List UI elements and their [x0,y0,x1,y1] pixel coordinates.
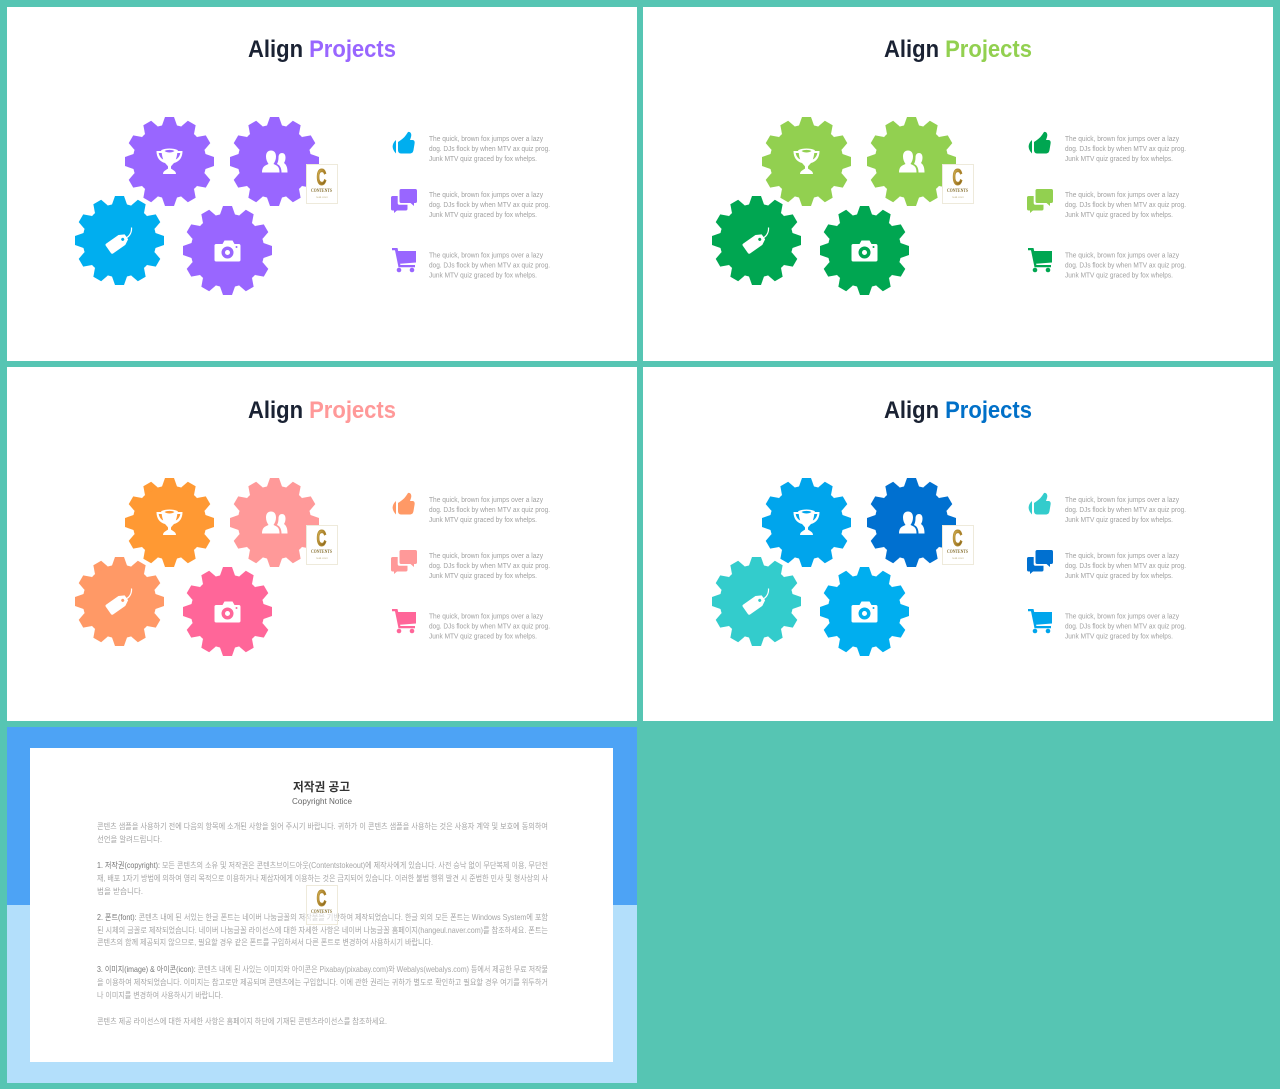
panel: green Align Projects [643,7,1273,361]
text: section 3 image and icon: 3. 이미지(image) & 아이콘(icon): 콘텐츠 내에 된 사있는 이미지와 아이콘은 Pixabay(pixabay.com)와 Webalys(webalys.com) 등에서 제공한 무료 저작물 [97,964,548,974]
watermark logo [942,164,974,204]
gear: price tag [75,557,164,646]
text: item 1: dog. DJs flock by when MTV ax quiz prog. [1065,507,1186,514]
text: item 3: dog. DJs flock by when MTV ax quiz prog. [1065,262,1186,270]
icon: thumbs up [1029,493,1051,514]
text: item 2: dog. DJs flock by when MTV ax quiz prog. [429,202,550,209]
text: item 3: The quick, brown fox jumps over a lazy [429,252,543,260]
gear: people [867,117,956,206]
text: item 2: Junk MTV quiz graced by fox whelps. [1065,573,1173,580]
title: Align Projects [884,36,1032,63]
watermark logo [306,164,338,204]
gear: trophy [762,478,851,567]
heading: copyright notice: 저작권 공고 [293,779,350,794]
watermark logo [306,885,338,924]
text: item 1: dog. DJs flock by when MTV ax quiz prog. [429,146,550,153]
gear: people [867,478,956,567]
gear: trophy [125,117,214,206]
text: item 2: The quick, brown fox jumps over a lazy [1065,553,1179,560]
icon: shopping cart [1028,248,1052,272]
text: section 2 font: 콘텐츠의 함께 제공되지 않으므로, 필요할 경우 같은 폰트를 구입하셔서 다른 폰트로 변경하여 사용하시기 바랍니다. [97,937,433,947]
text: intro: 콘텐츠 샘플을 사용하기 전에 다음의 항목에 소개된 사항을 읽어 주시기 바랍니다. 귀하가 이 콘텐츠 샘플을 사용하는 것은 사용자 계약 및 보호에 동의하여 [97,821,548,831]
text: item 2 [1065,192,1186,219]
watermark logo: C [952,164,962,190]
text: item 3: Junk MTV quiz graced by fox whelps. [1065,634,1173,640]
gear: camera [183,206,272,295]
text: item 2: dog. DJs flock by when MTV ax quiz prog. [429,563,550,570]
text: section 3 image and icon: 나 이미지를 변경하여 사용하시기 바랍니다. [97,990,223,1000]
watermark logo: real.com [316,195,329,199]
icon: thumbs up [393,132,415,154]
panel: purple Align Projects [7,7,637,361]
text: item 2 [429,553,550,580]
text: item 2: The quick, brown fox jumps over a lazy [429,192,543,199]
panel: copyright notice [7,727,637,1083]
text: item 2: Junk MTV quiz graced by fox whelps. [429,212,537,219]
gear: camera [820,206,909,295]
watermark logo: CONTENTS [311,910,332,915]
icon: speech bubbles [391,189,417,213]
text: intro [97,821,548,844]
text: item 3: Junk MTV quiz graced by fox whelps. [429,272,537,280]
text: item 2: The quick, brown fox jumps over a lazy [429,553,543,560]
text: item 1: Junk MTV quiz graced by fox whelps. [429,156,537,163]
watermark logo: real.com [316,556,329,560]
text: item 1: The quick, brown fox jumps over a lazy [1065,136,1179,143]
text: section 3 image and icon [97,964,548,1000]
icon: thumbs up [1029,132,1051,154]
watermark logo: C [316,525,326,551]
text: item 3 [1065,614,1186,640]
text: section 1 copyright: 1. 저작권(copyright): 모든 콘텐츠의 소유 및 저작권은 콘텐츠브이드아웃(Contentstokeout)에 제작사에게 있습니다. 사전 승낙 없이 무단복제 이용, 무단전 [97,860,548,870]
text: item 3: The quick, brown fox jumps over a lazy [1065,252,1179,260]
icon: speech bubbles [1027,550,1053,574]
watermark logo: C [316,885,326,911]
watermark logo: C [316,164,326,190]
watermark logo: real.com [952,195,965,199]
title: Align Projects [248,36,396,63]
panel: pink-orange Align Projects [7,367,637,721]
text: item 1: Junk MTV quiz graced by fox whelps. [1065,517,1173,524]
watermark logo: CONTENTS [947,189,968,194]
gear: people [230,478,319,567]
icon: shopping cart [392,609,416,633]
text: section 2 font: 2. 폰트(font): 콘텐츠 내에 된 서있는 한글 폰트는 네이버 나눔글꼴의 저작물을 기반하여 제작되었습니다. 한글 외의 모든 폰트는 Windows System에 포함 [97,912,548,922]
text: item 2: dog. DJs flock by when MTV ax quiz prog. [1065,563,1186,570]
text: item 3: The quick, brown fox jumps over a lazy [429,614,543,620]
watermark logo: CONTENTS [947,550,968,555]
text: item 1: dog. DJs flock by when MTV ax quiz prog. [1065,146,1186,153]
icon: speech bubbles [1027,189,1053,213]
text: item 2: Junk MTV quiz graced by fox whelps. [429,573,537,580]
gear: trophy [125,478,214,567]
text: item 3 [429,252,550,280]
watermark logo [306,525,338,564]
gear: people [230,117,319,206]
text: item 1 [1065,497,1186,524]
text: item 1: The quick, brown fox jumps over a lazy [429,497,543,504]
text: section 2 font [97,912,548,947]
watermark logo: C [952,525,962,551]
text: item 3 [429,614,550,640]
text: item 3 [1065,252,1186,280]
gear: price tag [712,557,801,646]
text: item 2 [1065,553,1186,580]
text: item 3: Junk MTV quiz graced by fox whelps. [1065,272,1173,280]
title: Align Projects [884,397,1032,424]
watermark logo: CONTENTS [311,550,332,555]
text: item 2 [429,192,550,219]
watermark logo: real.com [952,556,965,560]
text: item 3: dog. DJs flock by when MTV ax quiz prog. [1065,624,1186,630]
text: section 1 copyright: 재, 배포 1자기 방법에 의하여 영리 목적으로 이용하거나 제삼자에게 이용하는 것은 금지되어 있습니다. 이러한 불법 행위 발견 시 준법한 민사 및 형사상의 사 [97,873,548,883]
gear: price tag [712,196,801,285]
text: item 1 [429,497,550,524]
text: section 2 font: 된 시체의 글꼴로 제작되었습니다. 네이버 나눔글꼴 라이선스에 대한 자세한 사항은 네이버 나눔글꼴 홈페이지(hangeul.naver.com)를 참조하세요. 폰트는 [97,925,548,935]
watermark logo: CONTENTS [311,189,332,194]
gear: camera [183,567,272,656]
text: item 3: dog. DJs flock by when MTV ax quiz prog. [429,262,550,270]
text: item 1 [429,136,550,163]
text: section 1 copyright [97,860,548,896]
text: item 1: The quick, brown fox jumps over a lazy [1065,497,1179,504]
icon: shopping cart [392,248,416,272]
text: item 2: dog. DJs flock by when MTV ax quiz prog. [1065,202,1186,209]
text: item 3: Junk MTV quiz graced by fox whelps. [429,634,537,640]
text: section 3 image and icon: 을 이용하여 제작되었습니다. 이미지는 참고로만 제공되며 콘텐츠에는 구입합니다. 이에 관한 권리는 귀하가 별도로 확인하고 필요할 경우 여기를 위두하거 [97,977,548,987]
text: closing line: 콘텐츠 제공 라이선스에 대한 자세한 사항은 홈페이지 하단에 기재된 콘텐츠라이선스를 참조하세요. [97,1016,387,1026]
text: item 2: Junk MTV quiz graced by fox whelps. [1065,212,1173,219]
text: item 1 [1065,136,1186,163]
gear: trophy [762,117,851,206]
icon: shopping cart [1028,609,1052,633]
text: item 2: The quick, brown fox jumps over a lazy [1065,192,1179,199]
text: item 1: dog. DJs flock by when MTV ax quiz prog. [429,507,550,514]
watermark logo [942,525,974,564]
text: intro: 선언을 알려드립니다. [97,834,162,844]
text: item 1: Junk MTV quiz graced by fox whelps. [429,517,537,524]
gear: price tag [75,196,164,285]
subheading: Copyright Notice [292,797,353,806]
icon: thumbs up [393,493,415,514]
text: item 3: dog. DJs flock by when MTV ax quiz prog. [429,624,550,630]
panel: blue Align Projects [643,367,1273,721]
icon: speech bubbles [391,550,417,574]
title: Align Projects [248,397,396,424]
text: item 1: The quick, brown fox jumps over a lazy [429,136,543,143]
text: section 1 copyright: 법을 받습니다. [97,886,143,896]
text: item 1: Junk MTV quiz graced by fox whelps. [1065,156,1173,163]
text: item 3: The quick, brown fox jumps over a lazy [1065,614,1179,620]
gear: camera [820,567,909,656]
